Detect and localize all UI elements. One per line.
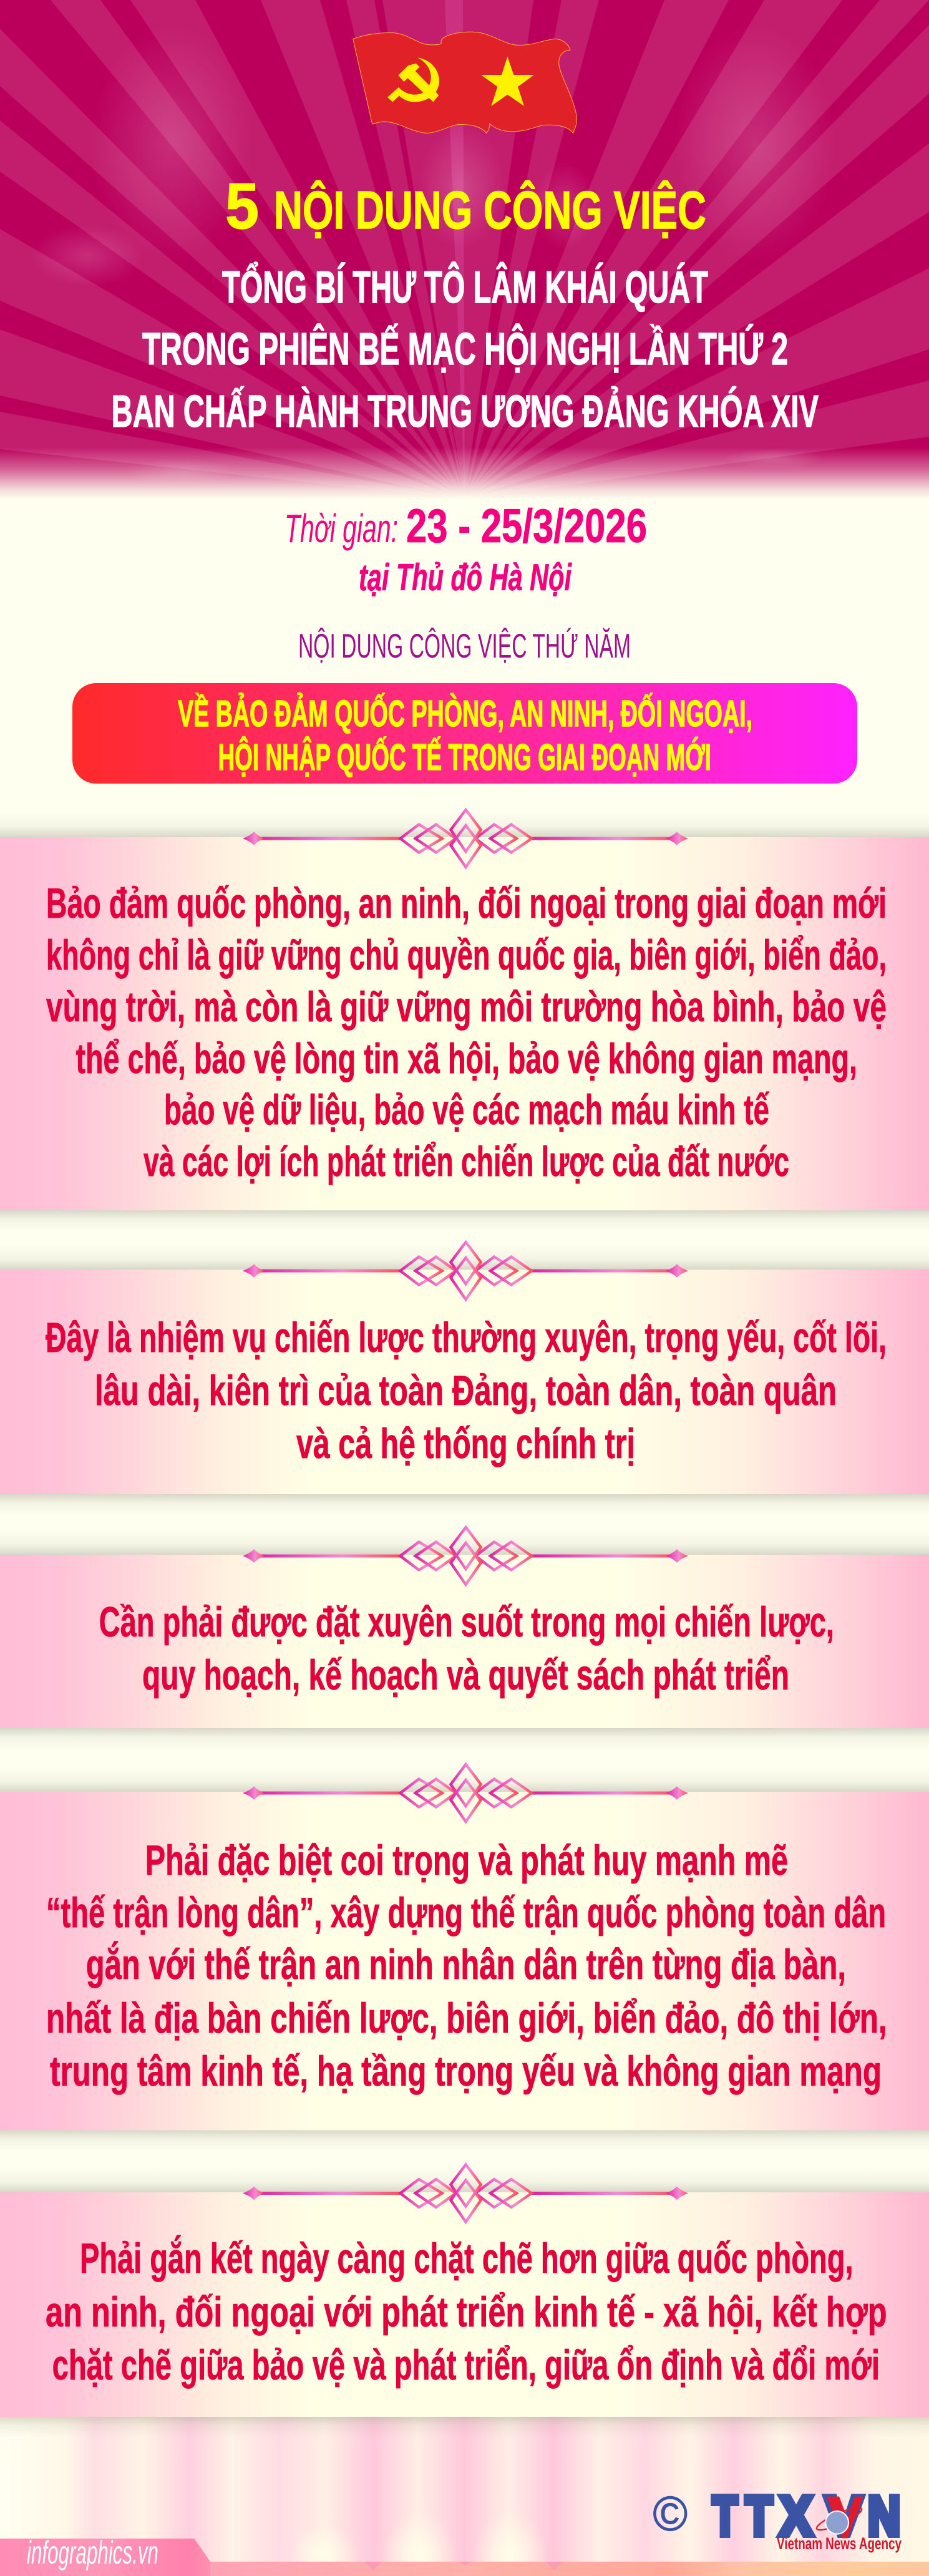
panel background	[0, 837, 929, 1210]
logo letter X: X	[780, 2485, 812, 2547]
paragraph 1	[46, 880, 887, 1185]
bottom shadow	[0, 2130, 929, 2152]
logo letter T: T	[713, 2485, 737, 2547]
panel background	[0, 1792, 929, 2130]
panel: content 4	[0, 1764, 929, 2152]
icon: party flag	[353, 32, 576, 133]
title: 5 nội dung công việc: NỘI DUNG CÔNG VIỆC	[274, 180, 706, 240]
paragraph 2	[46, 1314, 887, 1467]
icon: ornament divider	[243, 1527, 688, 1585]
event time	[285, 500, 647, 553]
event time: Thời gian:	[285, 506, 398, 551]
panel background	[0, 1555, 929, 1728]
banner: section heading	[72, 683, 857, 784]
top shadow	[0, 812, 929, 837]
strip spikes	[365, 2562, 563, 2570]
tab label: infographics.vn	[27, 2535, 158, 2571]
paragraph 2: và cả hệ thống chính trị	[296, 1420, 635, 1467]
footer tab: infographics.vn	[0, 2535, 210, 2576]
bottom shadow	[0, 1728, 929, 1751]
section label: NỘI DUNG CÔNG VIỆC THỨ NĂM	[298, 626, 631, 665]
icon: globe and orbit	[815, 2497, 863, 2538]
top shadow	[0, 1245, 929, 1270]
event place: tại Thủ đô Hà Nội	[359, 557, 572, 598]
icon: ornament divider	[243, 1764, 688, 1822]
soft glows	[31, 25, 836, 486]
logo: TTXVN	[713, 2485, 902, 2553]
panel background	[0, 1270, 929, 1494]
bottom shadow	[0, 1210, 929, 1233]
icon: ornament divider	[243, 1242, 688, 1300]
hero background	[0, 0, 929, 499]
panel: header hero	[0, 0, 929, 500]
bottom shadow	[0, 1494, 929, 1517]
fade to cream	[0, 447, 929, 500]
sunburst rays	[0, 0, 929, 499]
panel: content 5	[0, 2165, 929, 2417]
cream curtain folds	[290, 2511, 548, 2576]
panel: content 1	[0, 810, 929, 1233]
panel background	[0, 2192, 929, 2417]
curtain stripes	[0, 2417, 929, 2576]
panel: content 3	[0, 1527, 929, 1751]
event time: 23 - 25/3/2026	[406, 500, 647, 553]
title: 5 nội dung công việc: 5	[225, 170, 259, 243]
curtain top shadow	[0, 2417, 929, 2438]
title: 5 nội dung công việc	[225, 170, 706, 243]
logo letter V: V	[825, 2485, 862, 2547]
icon: ornament divider	[243, 2165, 688, 2222]
copyright symbol: ©	[653, 2486, 688, 2541]
logo letter T: T	[746, 2485, 772, 2547]
central bright ray	[445, 0, 465, 499]
banner background	[72, 683, 857, 784]
paragraph 4	[46, 1837, 887, 2095]
top shadow	[0, 1767, 929, 1792]
top shadow	[0, 2167, 929, 2192]
top shadow	[0, 1530, 929, 1555]
paragraph 5	[46, 2234, 887, 2389]
panel: footer curtain	[0, 2417, 929, 2576]
bottom colour strip	[0, 2562, 929, 2576]
paragraph 3	[99, 1598, 834, 1699]
panel: content 2	[0, 1242, 929, 1517]
icon: ornament divider	[243, 810, 688, 867]
logo letter N: N	[868, 2485, 900, 2547]
tab shape	[0, 2539, 210, 2576]
